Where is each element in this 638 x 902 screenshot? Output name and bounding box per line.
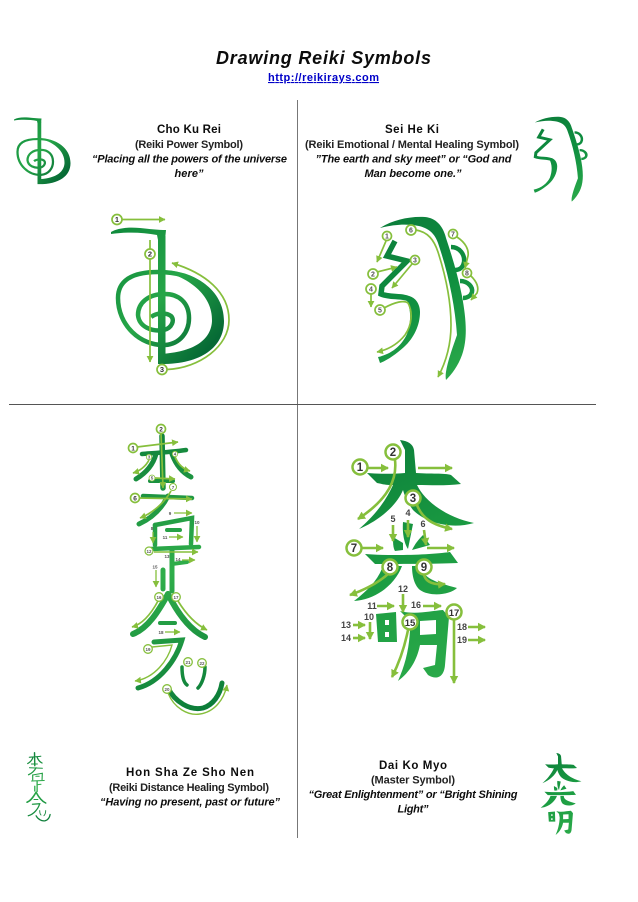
stroke order arrows: Hon Sha Ze Sho Nen: 3 xyxy=(148,454,151,460)
stroke order arrows: Hon Sha Ze Sho Nen: 8 xyxy=(151,526,154,531)
stroke order arrows: Hon Sha Ze Sho Nen: 11 xyxy=(163,535,168,540)
stroke order arrows: Hon Sha Ze Sho Nen: 5 xyxy=(151,476,154,480)
small symbol: Cho Ku Rei xyxy=(14,117,70,184)
stroke order arrows: Dai Ko Myo: 2 xyxy=(390,447,396,459)
panel: Cho Ku Rei xyxy=(14,117,287,375)
stroke order arrows: Sei He Ki: 2 xyxy=(371,272,375,278)
text block: Cho Ku Rei: Cho Ku Rei xyxy=(157,124,221,136)
stroke order arrows: Cho Ku Rei xyxy=(112,214,229,374)
stroke order arrows: Hon Sha Ze Sho Nen: 15 xyxy=(152,564,158,570)
text block: Dai Ko Myo: Dai Ko Myo xyxy=(379,760,447,772)
stroke order arrows: Dai Ko Myo: 18 xyxy=(457,622,467,632)
stroke order arrows: Cho Ku Rei: 3 xyxy=(160,365,164,374)
stroke order arrows: Sei He Ki: 5 xyxy=(378,308,382,314)
text block: Hon Sha Ze Sho Nen: (Reiki Distance Healing Symbol) xyxy=(109,782,269,794)
stroke order arrows: Dai Ko Myo: 7 xyxy=(351,543,357,555)
stroke order arrows: Hon Sha Ze Sho Nen: 18 xyxy=(158,630,164,635)
text block: Dai Ko Myo xyxy=(308,760,518,816)
stroke order arrows: Dai Ko Myo: 16 xyxy=(411,600,421,610)
text block: Cho Ku Rei: here” xyxy=(174,168,204,180)
large symbol: Hon Sha Ze Sho Nen xyxy=(133,436,222,709)
stroke order arrows: Hon Sha Ze Sho Nen xyxy=(128,424,227,714)
stroke order arrows: Dai Ko Myo: 11 xyxy=(367,601,377,611)
stroke order arrows: Dai Ko Myo: 12 xyxy=(398,584,408,594)
stroke order arrows: Hon Sha Ze Sho Nen: 6 xyxy=(133,496,137,502)
stroke order arrows: Dai Ko Myo: 4 xyxy=(405,508,411,518)
text block: Hon Sha Ze Sho Nen xyxy=(100,767,280,808)
stroke order arrows: Dai Ko Myo: 9 xyxy=(421,562,427,574)
stroke order arrows: Sei He Ki: 4 xyxy=(369,286,373,294)
text block: Cho Ku Rei: (Reiki Power Symbol) xyxy=(135,139,243,151)
stroke order arrows: Hon Sha Ze Sho Nen: 14 xyxy=(175,557,181,562)
text block: Sei He Ki: (Reiki Emotional / Mental Healing Symbol) xyxy=(305,139,519,151)
stroke order arrows: Dai Ko Myo: 14 xyxy=(341,633,351,643)
small symbol: Sei He Ki xyxy=(534,117,586,202)
stroke order arrows: Dai Ko Myo: 5 xyxy=(390,514,396,524)
horizontal divider xyxy=(9,404,596,406)
stroke order arrows: Hon Sha Ze Sho Nen: 13 xyxy=(164,554,170,559)
text block: Sei He Ki: Man become one.” xyxy=(364,168,462,180)
text block: Hon Sha Ze Sho Nen: “Having no present, past or future” xyxy=(100,796,280,808)
panel: Dai Ko Myo xyxy=(308,440,581,835)
stroke order arrows: Dai Ko Myo: 15 xyxy=(405,618,416,629)
text block: Cho Ku Rei xyxy=(92,124,287,180)
stroke order arrows: Hon Sha Ze Sho Nen: 19 xyxy=(145,647,151,652)
stroke order arrows: Hon Sha Ze Sho Nen: 4 xyxy=(174,452,177,456)
stroke order arrows: Hon Sha Ze Sho Nen: 7 xyxy=(172,485,175,490)
stroke order arrows: Hon Sha Ze Sho Nen: 20 xyxy=(164,687,170,692)
stroke order arrows: Hon Sha Ze Sho Nen: 22 xyxy=(199,661,205,666)
small symbol: Hon Sha Ze Sho Nen xyxy=(27,753,50,821)
panel: Hon Sha Ze Sho Nen xyxy=(27,424,281,821)
stroke order arrows: Sei He Ki: 1 xyxy=(385,234,389,240)
panel: Sei He Ki xyxy=(305,117,586,380)
stroke order arrows: Sei He Ki xyxy=(366,225,478,377)
vertical divider xyxy=(296,100,298,838)
large symbol: Cho Ku Rei xyxy=(111,228,224,364)
stroke order arrows: Cho Ku Rei: 1 xyxy=(115,215,119,224)
stroke order arrows: Sei He Ki: 3 xyxy=(413,258,417,264)
text block: Sei He Ki: ”The earth and sky meet” or “God and xyxy=(316,154,512,166)
text block: Dai Ko Myo: (Master Symbol) xyxy=(371,774,455,786)
small symbol: Dai Ko Myo xyxy=(541,753,581,835)
stroke order arrows: Dai Ko Myo xyxy=(341,444,485,683)
text block: Cho Ku Rei: “Placing all the powers of the universe xyxy=(92,154,287,166)
stroke order arrows: Sei He Ki: 8 xyxy=(465,270,469,278)
text block: Sei He Ki: Sei He Ki xyxy=(385,124,439,136)
title: Drawing Reiki Symbols xyxy=(216,48,431,68)
stroke order arrows: Cho Ku Rei: 2 xyxy=(148,250,152,259)
stroke order arrows: Dai Ko Myo: 6 xyxy=(420,519,426,529)
stroke order arrows: Sei He Ki: 6 xyxy=(409,228,413,234)
stroke order arrows: Dai Ko Myo: 10 xyxy=(364,612,374,622)
text block: Dai Ko Myo: Light” xyxy=(398,804,429,816)
stroke order arrows: Dai Ko Myo: 19 xyxy=(457,635,467,645)
large symbol: Dai Ko Myo xyxy=(354,440,474,681)
stroke order arrows: Sei He Ki: 7 xyxy=(451,232,455,238)
stroke order arrows: Hon Sha Ze Sho Nen: 10 xyxy=(194,520,200,525)
stroke order arrows: Dai Ko Myo: 13 xyxy=(341,620,351,630)
text block: Sei He Ki xyxy=(305,124,519,180)
stroke order arrows: Hon Sha Ze Sho Nen: 2 xyxy=(159,426,163,434)
stroke order arrows: Hon Sha Ze Sho Nen: 1 xyxy=(131,446,135,452)
stroke order arrows: Dai Ko Myo: 1 xyxy=(357,462,364,474)
large symbol: Sei He Ki xyxy=(378,217,472,380)
stroke order arrows: Hon Sha Ze Sho Nen: 17 xyxy=(173,595,179,600)
stroke order arrows: Hon Sha Ze Sho Nen: 12 xyxy=(146,549,152,554)
stroke order arrows: Hon Sha Ze Sho Nen: 9 xyxy=(169,511,172,516)
source link: http://reikirays.com xyxy=(268,72,379,84)
stroke order arrows: Hon Sha Ze Sho Nen: 21 xyxy=(185,660,191,665)
stroke order arrows: Dai Ko Myo: 3 xyxy=(410,493,416,505)
text block: Hon Sha Ze Sho Nen: Hon Sha Ze Sho Nen xyxy=(126,767,254,779)
text block: Dai Ko Myo: “Great Enlightenment” or “Bright Shining xyxy=(308,789,518,801)
stroke order arrows: Dai Ko Myo: 17 xyxy=(449,608,459,619)
stroke order arrows: Dai Ko Myo: 8 xyxy=(387,562,394,574)
stroke order arrows: Hon Sha Ze Sho Nen: 16 xyxy=(156,595,162,600)
